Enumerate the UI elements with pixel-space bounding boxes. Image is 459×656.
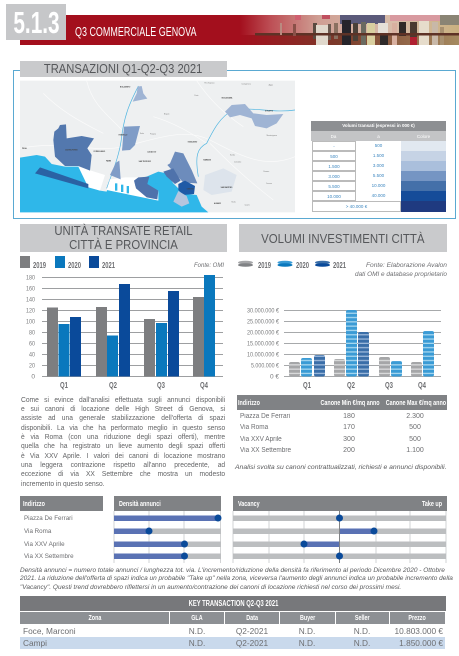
bar chart: Q2: [109, 380, 117, 390]
row: Campi: Q2-2021: [236, 638, 268, 648]
header: vacancy take up: Take up: [422, 499, 442, 508]
bar chart: 20: [29, 362, 35, 370]
bar chart: 160: [26, 286, 35, 292]
bar chart: 40: [29, 352, 35, 358]
header: vacancy take up: [233, 496, 447, 511]
legend table: volumi transati: 5.500: [328, 184, 340, 189]
bar chart: 100: [26, 318, 35, 326]
map of Genova: Aggio: [269, 83, 273, 86]
column headers: [20, 612, 445, 624]
header: indirizzo: Indirizzo: [23, 499, 45, 508]
panel: unita transate: [20, 223, 227, 390]
map of Genova: Pomaro: [263, 171, 269, 173]
legend table: volumi transati: 500: [330, 154, 338, 159]
row: Foce, Marconi: Foce, Marconi: [23, 626, 76, 636]
map labels: MOLASSANA: [222, 97, 233, 100]
street labels: Piazza De Ferrari: [24, 515, 73, 522]
bar chart: Q4: [200, 380, 208, 390]
map labels: SAN MARTINO: [221, 186, 233, 189]
column headers: Seller: [355, 613, 370, 622]
note: analisi canoni: Analisi svolta su canoni contrattualizzati, richiesti e annunci disponibili.: [235, 464, 447, 471]
section number: 5.1.3: [13, 5, 59, 40]
table header: Canone Min €/mq anno: [320, 398, 380, 407]
legend: 2019: [258, 261, 271, 270]
column headers: Prezzo: [409, 613, 426, 622]
stacked coin chart: Q4: [418, 380, 426, 390]
row: Campi: N.D.: [299, 638, 315, 648]
row: Campi: [20, 637, 445, 649]
table title: [20, 596, 446, 611]
bar chart: 120: [26, 308, 35, 314]
map labels: BOLZANETO: [120, 85, 131, 88]
text block: analisi: [21, 394, 225, 488]
legend: [20, 256, 115, 270]
text block: analisi: assiste ad una generale stabilizzazione dell'offerta di spazi: [21, 413, 225, 422]
map labels: GENOVA: [187, 187, 195, 190]
heading: CITTÀ E PROVINCIA: [69, 237, 178, 252]
row: Campi: Campi: [23, 638, 47, 648]
legend title: Volumi transati (espressi in 000 €): [342, 123, 415, 128]
map labels: STAGLIENO: [188, 141, 198, 144]
map of Genova: Quarto: [245, 203, 250, 206]
map labels: PEGLI: [22, 148, 28, 150]
stacked coin chart: 25.000.000 €: [247, 318, 279, 326]
bar chart: Q1: [60, 380, 68, 390]
legend table: volumi transati: Da: [331, 134, 336, 139]
map of Genova: Sanda: [230, 154, 235, 156]
column headers: Zona: [88, 613, 101, 622]
street labels: Via Roma: [24, 528, 51, 535]
table: canoni: 180: [343, 413, 355, 420]
legend table: volumi transati: 500: [375, 143, 382, 148]
legend table: volumi transati: 1.500: [328, 164, 340, 169]
table header: Indirizzo: [238, 398, 260, 407]
row: Foce, Marconi: [23, 626, 443, 636]
legend table: volumi transati: -: [333, 144, 335, 149]
map of Genova: Fregoso: [150, 134, 156, 136]
stacked coin chart: Q3: [385, 380, 393, 390]
map of Genova: Cornaleto: [234, 161, 241, 164]
row: Foce, Marconi: 10.803.000 €: [395, 626, 443, 636]
text block: analisi: è via Roma (con una riduzione degli spazi offerti), mentre: [21, 432, 225, 441]
street labels: Via XX Settembre: [24, 553, 74, 560]
bar chart: Q3: [157, 380, 165, 390]
panel: densita e vacancy: [20, 496, 447, 563]
text block: analisi: quella che ha registrato un lieve aumento degli spazi offerti: [21, 441, 225, 450]
map of Genova: Cartagenova: [241, 83, 251, 86]
map labels: ALBARO: [214, 202, 222, 205]
legend table: volumi transati: Colore: [417, 134, 430, 139]
map labels: LAGACCIO: [147, 151, 157, 154]
column headers: Data: [246, 613, 258, 622]
heading: [239, 224, 447, 252]
bar chart: [20, 256, 224, 390]
legend table: volumi transati: > 40.000 €: [346, 204, 367, 209]
table: canoni: 200: [343, 446, 355, 454]
bar chart: 140: [26, 296, 35, 304]
legend table: volumi transati: 3.000: [373, 163, 384, 168]
section title: Q3 COMMERCIALE GENOVA: [75, 24, 196, 39]
row: Foce, Marconi: N.D.: [354, 626, 370, 636]
table title: KEY TRANSACTION Q2-Q3 2021: [188, 599, 278, 608]
header photo: shoppers: [244, 15, 459, 45]
table: canoni: Via Roma: [240, 424, 268, 431]
legend table: volumi transati: 1.500: [373, 153, 384, 158]
stacked coin chart: Q2: [347, 380, 355, 390]
table: canoni: 170: [343, 424, 355, 431]
map labels: FAMEI: [106, 159, 112, 162]
footnote: Densità annunci = numero totale annunci / lunghezza tot. via. L'incremento/riduzione della densità fa riferimento al periodo Dicembre 2020 - Ottobre: [20, 566, 445, 574]
stacked coin chart: 20.000.000 €: [247, 330, 279, 336]
street labels: [24, 515, 74, 560]
legend: 2019: [33, 261, 46, 270]
panel frame: [13, 70, 456, 219]
text block: analisi: eccezione di via XX Settembre che mostra un modesto: [21, 469, 225, 478]
map labels: MARASSI: [203, 159, 212, 162]
footnote: [20, 566, 453, 590]
bar chart: Fonte: OMI: [194, 263, 224, 269]
text block: analisi: una leggera contrazione rispetto all'anno precedente, ad: [21, 460, 225, 469]
bar chart: 180: [26, 274, 35, 282]
panel: volumi investimenti: [238, 224, 448, 390]
row: Foce, Marconi: N.D.: [189, 626, 205, 636]
bar chart: 60: [29, 340, 35, 348]
map of Genova: Montesignano: [267, 134, 277, 137]
bar chart: 80: [29, 330, 35, 336]
legend: [238, 261, 346, 270]
red title band: [20, 15, 459, 45]
table: canoni: Piazza De Ferrari: [240, 413, 290, 420]
map labels: RIVAROLO: [119, 133, 128, 136]
table: canoni: 500: [409, 424, 421, 431]
legend table: volumi transati: 10.000: [327, 194, 341, 199]
column headers: Buyer: [300, 613, 315, 622]
table: canoni: Via XXV Aprile: [240, 436, 282, 442]
row: Campi: 1.850.000 €: [399, 638, 443, 648]
heading: [20, 224, 227, 252]
heading: VOLUMI INVESTIMENTI CITTÀ: [261, 231, 425, 246]
row: Foce, Marconi: N.D.: [299, 626, 315, 636]
legend table: volumi transati: 3.000: [328, 174, 340, 179]
stacked coin chart: Fonte: Elaborazione Avalon: [366, 262, 448, 269]
stacked coin chart: dati OMI e database proprietario: [355, 271, 448, 278]
map of Genova: [20, 80, 295, 212]
header band: [6, 4, 459, 45]
legend table: volumi transati: a: [377, 134, 380, 139]
text block: analisi: disponibili. La via che ha performato meglio in questo senso: [21, 423, 225, 432]
sea: [20, 155, 208, 212]
row: Campi: N.D.: [189, 638, 205, 648]
map labels: STRUPPA: [265, 109, 274, 112]
row: Campi: N.D.: [354, 638, 370, 648]
header: densita annunci: [114, 496, 221, 511]
stacked coin chart: Q1: [303, 380, 311, 390]
header: indirizzo: [20, 496, 103, 511]
text block: analisi: è Via XXV Aprile. I valori dei canoni di locazione mostrano: [21, 451, 225, 460]
bar chart: 0: [31, 374, 35, 380]
text block: analisi: e sui canoni di locazione delle High Street di Genova, si: [21, 404, 225, 413]
map of Genova: Prato: [194, 94, 198, 97]
table: key transaction: [20, 596, 446, 649]
footnote: 2021. La riduzione dell'offerta di spazi indica un probabile "Take up" nella zona, viceversa l'aumento degli annunci indica un probabile incremento della: [20, 575, 453, 582]
heading: UNITÀ TRANSATE RETAIL: [54, 223, 193, 238]
panel heading: TRANSAZIONI Q1-Q2-Q3 2021: [44, 61, 203, 76]
map labels: CORNIGLIANO: [93, 150, 106, 153]
panel: transazioni map: [13, 61, 456, 219]
map labels: CASTELFERMO: [65, 149, 78, 152]
stacked coin chart: 0 €: [270, 374, 279, 380]
legend: 2020: [68, 261, 81, 270]
row: Foce, Marconi: Q2-2021: [236, 626, 268, 636]
stacked coin chart: 10.000.000 €: [247, 352, 279, 358]
table: canoni: 2.300: [406, 413, 424, 420]
map labels: [22, 85, 274, 205]
legend: 2021: [102, 261, 115, 270]
legend table: volumi transati: 40.000: [372, 193, 385, 198]
table: canoni: 300: [343, 436, 355, 442]
legend table: volumi transati: 5.500: [373, 173, 384, 178]
column headers: GLA: [191, 613, 203, 622]
stacked coin chart: 5.000.000 €: [251, 362, 279, 370]
zones: [133, 86, 147, 102]
stacked coin chart: [238, 260, 448, 390]
map of Genova: Sturla: [231, 201, 236, 204]
legend: 2020: [296, 261, 309, 270]
header: vacancy take up: Vacancy: [238, 499, 260, 508]
map of Genova: Sotto: [140, 132, 144, 135]
text block: analisi: Come si evince dall'analisi effettuata sugli annunci disponibili: [21, 394, 225, 404]
table: canoni: [237, 395, 447, 454]
table: canoni: 500: [409, 436, 421, 442]
table header: [237, 395, 447, 410]
map of Genova: Pino Soprano: [204, 82, 214, 84]
legend table: volumi transati: [311, 121, 446, 212]
street labels: Via XXV Aprile: [24, 541, 65, 548]
legend table: volumi transati: 10.000: [372, 183, 385, 188]
stacked coin chart: 15.000.000 €: [247, 340, 279, 348]
footnote: "Vacancy". Questi trend dovrebbero riflettersi in un aumento/contrazione dei canoni di locazione richiesti nel corso dei prossimi mesi.: [20, 584, 401, 590]
legend title: [311, 121, 446, 131]
map labels: SAN TEODORO: [139, 160, 152, 163]
table header: Canone Max €/mq anno: [386, 398, 446, 407]
table: canoni: Via XX Settembre: [240, 446, 291, 454]
map of Genova: Cervara: [266, 183, 272, 185]
text block: analisi: incremento in questo senso.: [21, 479, 105, 488]
legend: 2021: [333, 261, 346, 270]
header: densita annunci: Densità annunci: [119, 499, 161, 508]
table: canoni: 1.100: [406, 446, 424, 454]
stacked coin chart: 30.000.000 €: [247, 308, 279, 314]
map of Genova: Begato: [164, 112, 169, 115]
